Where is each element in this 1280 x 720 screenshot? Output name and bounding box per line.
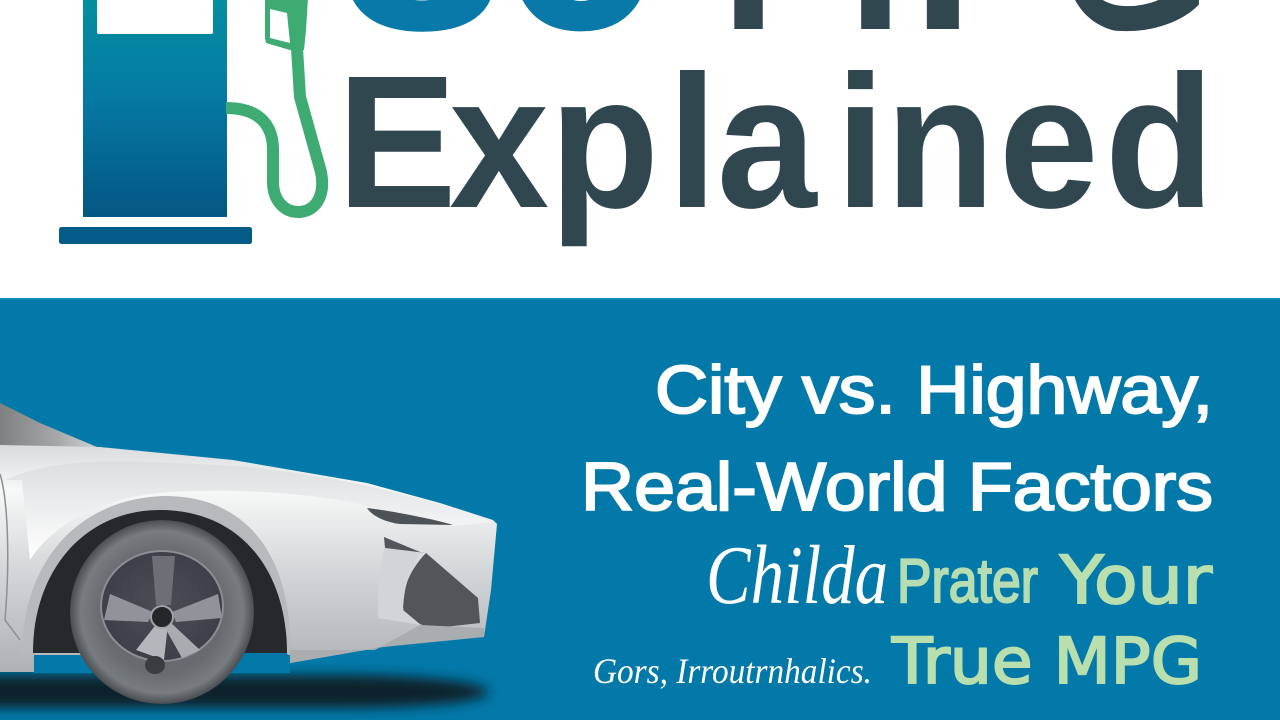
pump screen (97, 0, 213, 34)
hub (151, 606, 173, 628)
garbled condensed word: Prater (897, 547, 1038, 616)
garbled script word: Childa (706, 529, 888, 622)
white header background (0, 0, 1280, 298)
windshield (0, 403, 97, 447)
car body (0, 445, 497, 672)
wheel arch trim (22, 496, 290, 655)
valve nut (145, 656, 165, 674)
blue gap below arch (34, 655, 290, 673)
subtitle: Real-World Factors: Real-World Factors (581, 449, 1213, 525)
callout words: True MPG: True MPG (891, 625, 1202, 698)
pump base (59, 227, 252, 244)
tire (70, 520, 254, 704)
rim (101, 551, 223, 661)
fuel nozzle (265, 0, 308, 50)
headlight (367, 508, 453, 525)
pump body (83, 0, 227, 217)
door seam (0, 474, 20, 640)
hood highlight (5, 461, 493, 560)
G letter left trim (1040, 0, 1125, 33)
blue lower panel (0, 298, 1280, 720)
garbled small text: Gors, Irroutrnhalics. (593, 651, 872, 691)
icon: fuel pump (59, 0, 322, 244)
car ground shadow (0, 675, 488, 708)
fuel hose (226, 48, 322, 212)
gap between M legs (765, 0, 859, 33)
wheel arch (33, 510, 287, 653)
subtitle: City vs. Highway: City vs. Highway, (655, 352, 1213, 428)
title: 30 MPG (343, 0, 1213, 79)
intake panel (378, 548, 421, 625)
lower lip (290, 625, 484, 663)
title: Explained: Explained (337, 37, 1214, 248)
air intake (384, 537, 480, 628)
nozzle handle opening (270, 9, 290, 43)
illustration: silver car (0, 403, 497, 704)
spokes (104, 556, 222, 660)
callout word: Your: Your (1059, 542, 1213, 619)
